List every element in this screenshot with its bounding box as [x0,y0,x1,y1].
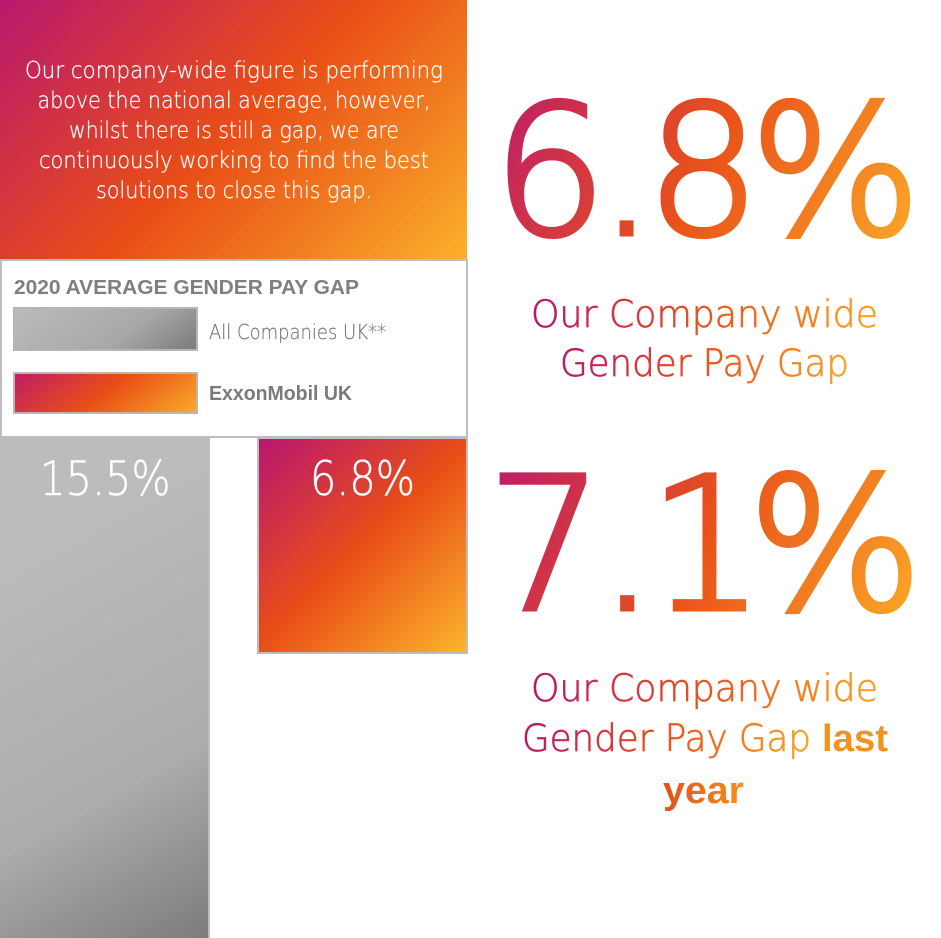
bar: all companies 15.5% [0,438,209,938]
intro text: above the national average, however, [38,86,430,114]
bar value 15.5%: 15.5% [40,452,170,507]
caption: company wide gender pay gap last year: year [663,770,744,812]
legend item: all companies [14,308,386,350]
caption: company wide gender pay gap: Gender Pay Gap [560,342,849,385]
panel: legend [1,260,467,437]
legend item: all companies: All Companies UK** [209,320,386,344]
bar: ExxonMobil UK 6.8% [258,438,467,653]
panel: intro statement [0,0,467,260]
legend item: ExxonMobil UK [14,373,353,413]
caption: company wide gender pay gap last year [522,667,888,812]
legend heading: 2020 AVERAGE GENDER PAY GAP [14,277,359,299]
intro text: whilst there is still a gap, we are [69,116,399,144]
intro text [25,56,443,204]
intro text: continuously working to find the best [39,146,429,174]
caption: company wide gender pay gap: Our Company wide [531,293,878,336]
intro text: solutions to close this gap. [96,176,372,204]
intro text: Our company-wide figure is performing [25,56,443,84]
big figure: 7.1%: 7.1% [487,439,923,653]
caption: company wide gender pay gap last year: Gender Pay Gap [522,717,811,760]
caption: company wide gender pay gap [531,293,878,385]
caption: company wide gender pay gap last year: Our Company wide [531,667,878,710]
caption: company wide gender pay gap last year: last [822,718,888,760]
bar value 6.8%: 6.8% [310,452,415,507]
big figure: 6.8%: 6.8% [492,68,921,277]
legend item: ExxonMobil UK: ExxonMobil UK [209,383,353,405]
